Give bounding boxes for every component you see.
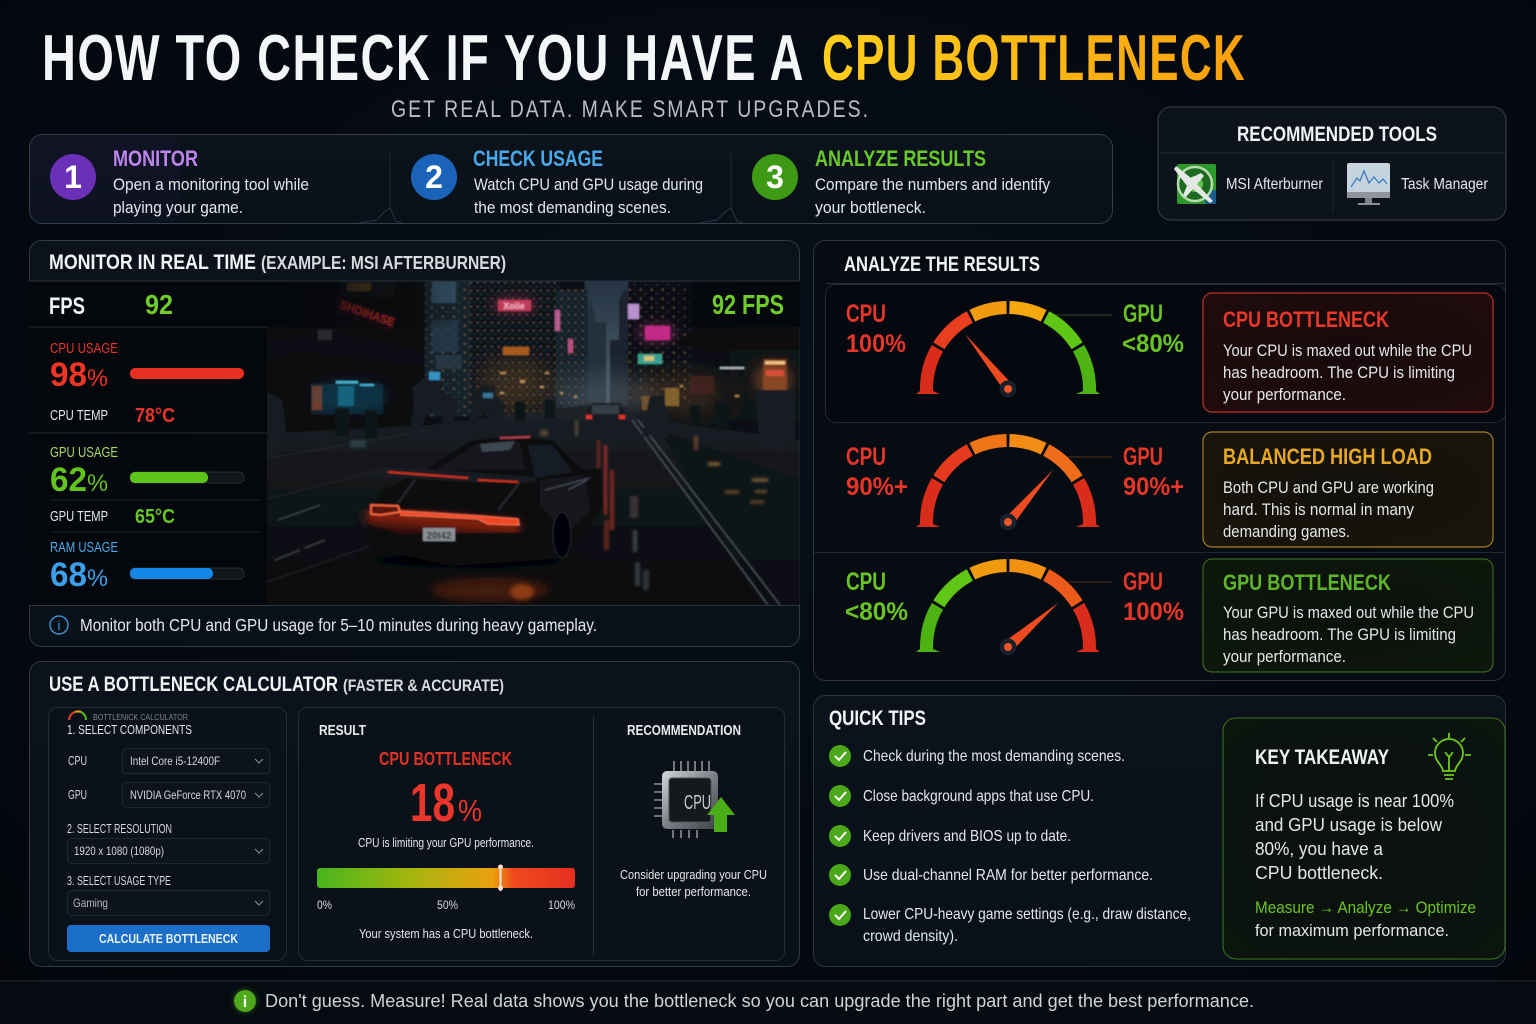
tip 2: Close background apps that use CPU.	[863, 788, 1094, 805]
calculator form: 1. SELECT COMPONENTS	[67, 722, 192, 737]
footer message: Don't guess. Measure! Real data shows you the bottleneck so you can upgrade the right part and get the best performance.	[265, 990, 1254, 1011]
card: cpu bottleneck: CPU BOTTLENECK	[1223, 307, 1390, 332]
row 2: balanced high load	[846, 432, 1493, 547]
card: gpu bottleneck: has headroom. The GPU is limiting	[1223, 626, 1456, 644]
step 2: check usage	[411, 146, 703, 217]
gradient meter: 0%	[317, 898, 332, 912]
fps readout: 92 FPS	[712, 289, 784, 320]
fps readout	[49, 289, 784, 320]
game screenshot: rainy cyberpunk street with sports car: Xoiie	[503, 301, 525, 311]
step 1: monitor: Open a monitoring tool while	[113, 175, 309, 194]
tip 1: Check during the most demanding scenes.	[863, 748, 1125, 765]
stat: gpu usage: GPU USAGE	[50, 445, 118, 461]
icon: msi afterburner	[1174, 164, 1216, 204]
heading: monitor in real time: (EXAMPLE: MSI AFTERBURNER)	[261, 253, 506, 273]
stat: ram usage: 68	[50, 556, 87, 594]
icon: cpu with upgrade arrow	[654, 761, 735, 838]
fps readout: 92	[145, 289, 173, 320]
step 3: analyze results: Compare the numbers and identify	[815, 175, 1050, 194]
key takeaway card: and GPU usage is below	[1255, 814, 1443, 835]
readouts: GPU	[1123, 568, 1163, 596]
subtitle: GET REAL DATA. MAKE SMART UPGRADES.	[391, 96, 870, 123]
calculator form: CPU	[68, 754, 87, 768]
icon: light bulb	[1428, 733, 1471, 779]
icon: cpu with upgrade arrow: CPU	[684, 792, 711, 814]
stat: cpu usage	[50, 341, 244, 427]
right buildings	[628, 282, 758, 434]
tip 2	[829, 785, 1094, 807]
tip 3: Keep drivers and BIOS up to date.	[863, 828, 1071, 845]
step 2: check usage: the most demanding scenes.	[474, 198, 671, 217]
tip 3	[829, 825, 1071, 847]
card: cpu bottleneck: Your CPU is maxed out while the CPU	[1223, 342, 1472, 360]
readouts: CPU	[846, 300, 886, 328]
main sports car	[365, 436, 603, 570]
gradient meter: 50%	[437, 898, 458, 912]
select: gpu	[122, 782, 270, 808]
tip 5: Lower CPU-heavy game settings (e.g., draw distance,	[863, 906, 1191, 923]
key takeaway card	[1223, 718, 1505, 959]
step 3: analyze results: ANALYZE RESULTS	[815, 146, 986, 171]
icon: green info	[232, 988, 258, 1014]
title: CPU BOTTLENECK	[822, 21, 1246, 94]
panel: recommended tools: MSI Afterburner	[1226, 176, 1323, 193]
info note: i	[58, 618, 61, 633]
shop lights	[311, 384, 383, 414]
card: cpu bottleneck: has headroom. The CPU is limiting	[1223, 364, 1455, 382]
card: cpu bottleneck	[1203, 293, 1493, 412]
tip 4	[829, 864, 1153, 886]
readouts: 100%	[846, 330, 906, 358]
select: usage type: Gaming	[73, 896, 108, 910]
heading: monitor in real time: MONITOR IN REAL TIME	[49, 250, 256, 274]
sidewalk	[660, 430, 800, 605]
icon: task manager monitor	[1347, 163, 1390, 205]
result card: %	[458, 793, 482, 828]
info note: Monitor both CPU and GPU usage for 5–10 minutes during heavy gameplay.	[80, 615, 597, 635]
readouts	[846, 300, 1184, 358]
heading: use a bottleneck calculator: (FASTER & ACCURATE)	[343, 676, 504, 695]
select: cpu	[122, 748, 270, 774]
stat: gpu usage: GPU TEMP	[50, 509, 108, 525]
readouts: GPU	[1123, 300, 1163, 328]
number plate	[423, 528, 455, 541]
step 1: monitor: MONITOR	[113, 146, 198, 171]
key takeaway card: Measure → Analyze → Optimize	[1255, 898, 1476, 917]
calculator form: BOTTLENICK CALCULATOR	[93, 713, 188, 722]
result card: RESULT	[319, 723, 366, 739]
step 2: check usage: CHECK USAGE	[473, 146, 603, 171]
select: usage type	[68, 890, 270, 916]
heading: use a bottleneck calculator: USE A BOTTLENECK CALCULATOR	[49, 672, 338, 696]
card: gpu bottleneck: Your GPU is maxed out while the CPU	[1223, 604, 1474, 622]
stat: cpu usage: 98	[50, 356, 87, 394]
stat: cpu usage: CPU TEMP	[50, 408, 108, 424]
result card	[298, 708, 784, 960]
card: balanced high load: hard. This is normal in many	[1223, 501, 1415, 519]
gradient meter	[317, 864, 575, 912]
heading: quick tips: QUICK TIPS	[829, 707, 926, 730]
select: resolution: 1920 x 1080 (1080p)	[74, 844, 164, 858]
tip 5: crowd density).	[863, 928, 958, 945]
gauge 1	[916, 308, 1100, 398]
select: gpu: NVIDIA GeForce RTX 4070	[130, 788, 246, 802]
readouts: <80%	[1122, 330, 1184, 358]
card: gpu bottleneck: GPU BOTTLENECK	[1223, 570, 1392, 595]
game screenshot: rainy cyberpunk street with sports car	[29, 281, 800, 605]
stat: cpu usage: 78°C	[135, 405, 175, 427]
tram rails	[632, 420, 780, 605]
result card: CPU is limiting your GPU performance.	[358, 836, 534, 850]
main sports car: 20I42	[426, 531, 452, 542]
heading: monitor in real time	[49, 250, 506, 274]
stat: cpu usage: CPU USAGE	[50, 341, 118, 357]
icon: small gauge	[69, 711, 86, 720]
readouts: GPU	[1123, 443, 1163, 471]
result card: for better performance.	[636, 885, 751, 899]
tip 5	[829, 904, 1191, 945]
icon: green info: i	[243, 994, 247, 1011]
select: resolution	[68, 838, 270, 864]
card: cpu bottleneck: your performance.	[1223, 386, 1346, 404]
readouts: <80%	[845, 598, 908, 626]
step 1: monitor: playing your game.	[113, 198, 243, 217]
row 1: cpu bottleneck	[846, 293, 1493, 412]
left dark building	[267, 327, 428, 430]
tip 1	[829, 745, 1125, 767]
result card: RECOMMENDATION	[627, 723, 741, 739]
wet road reflections	[350, 420, 768, 590]
key takeaway card: KEY TAKEAWAY	[1255, 746, 1389, 769]
footer message	[0, 981, 1536, 1024]
readouts: 90%+	[1123, 473, 1184, 501]
stat: gpu usage: 62	[50, 461, 87, 499]
road	[267, 404, 800, 604]
card: balanced high load: Both CPU and GPU are working	[1223, 479, 1434, 497]
step 2: check usage: 2	[425, 159, 443, 195]
panel: recommended tools	[1158, 107, 1506, 220]
stat: gpu usage: %	[87, 470, 108, 497]
panel: quick tips	[814, 696, 1506, 966]
calculator form	[48, 708, 286, 960]
readouts	[845, 568, 1184, 626]
step 3: analyze results	[752, 146, 1050, 217]
distant car	[584, 402, 626, 420]
readouts: CPU	[846, 443, 886, 471]
neon signs	[342, 300, 394, 332]
panel: three steps	[30, 134, 1112, 224]
gauge 2	[916, 440, 1100, 530]
game screenshot: rainy cyberpunk street with sports car: SHDIHASE	[338, 298, 396, 329]
button: calculate bottleneck	[67, 925, 270, 952]
fps readout: FPS	[49, 293, 85, 320]
step 1: monitor	[50, 146, 309, 217]
street lamp specks	[500, 372, 739, 398]
result card: 18	[410, 773, 455, 833]
title: HOW TO CHECK IF YOU HAVE A	[42, 21, 805, 94]
robots	[267, 378, 796, 440]
tail lights	[371, 505, 400, 515]
result card: Consider upgrading your CPU	[620, 868, 767, 882]
stat: ram usage: RAM USAGE	[50, 540, 118, 556]
rear spoiler	[406, 468, 538, 484]
tip 4: Use dual-channel RAM for better performance.	[863, 867, 1153, 884]
panel: recommended tools: RECOMMENDED TOOLS	[1237, 123, 1437, 146]
readouts: 90%+	[846, 473, 908, 501]
step 3: analyze results: 3	[766, 159, 784, 195]
panel: monitor in real time	[29, 240, 800, 646]
result card: CPU BOTTLENECK	[379, 749, 512, 769]
calculator form: GPU	[68, 788, 87, 802]
readouts: 100%	[1123, 598, 1184, 626]
left dark overlay	[29, 327, 267, 605]
stat: ram usage	[50, 540, 244, 594]
step 1: monitor: 1	[64, 159, 82, 195]
stat: gpu usage: 65°C	[135, 506, 175, 528]
calculator form: 3. SELECT USAGE TYPE	[67, 874, 171, 888]
key takeaway card: CPU bottleneck.	[1255, 862, 1383, 883]
stat: ram usage: %	[87, 565, 108, 592]
street fog	[555, 375, 655, 415]
centre buildings	[462, 281, 560, 416]
readouts	[846, 443, 1184, 501]
gradient meter: 100%	[548, 898, 575, 912]
key takeaway card: If CPU usage is near 100%	[1255, 790, 1454, 811]
step 3: analyze results: your bottleneck.	[815, 198, 926, 217]
key takeaway card: 80%, you have a	[1255, 838, 1384, 859]
stat: gpu usage	[50, 445, 260, 528]
row 3: gpu bottleneck	[845, 559, 1493, 672]
distant towers	[586, 298, 606, 406]
button: calculate bottleneck: CALCULATE BOTTLENECK	[99, 931, 238, 946]
calculator form: 2. SELECT RESOLUTION	[67, 822, 172, 836]
step 2: check usage: Watch CPU and GPU usage during	[474, 175, 703, 194]
stat: cpu usage: %	[87, 365, 108, 392]
panel: analyze the results	[814, 240, 1506, 680]
gauge 3	[916, 566, 1100, 656]
card: balanced high load: BALANCED HIGH LOAD	[1223, 444, 1432, 469]
card: gpu bottleneck: your performance.	[1223, 648, 1346, 666]
card: gpu bottleneck	[1203, 559, 1493, 672]
panel: recommended tools: Task Manager	[1401, 176, 1488, 193]
panel: bottleneck calculator	[30, 662, 800, 966]
heading: analyze the results: ANALYZE THE RESULTS	[844, 253, 1040, 276]
select: cpu: Intel Core i5-12400F	[130, 754, 220, 768]
card: balanced high load	[1203, 432, 1493, 547]
readouts: CPU	[846, 568, 886, 596]
card: balanced high load: demanding games.	[1223, 523, 1350, 541]
result card: Your system has a CPU bottleneck.	[359, 927, 533, 941]
key takeaway card: for maximum performance.	[1255, 921, 1449, 940]
